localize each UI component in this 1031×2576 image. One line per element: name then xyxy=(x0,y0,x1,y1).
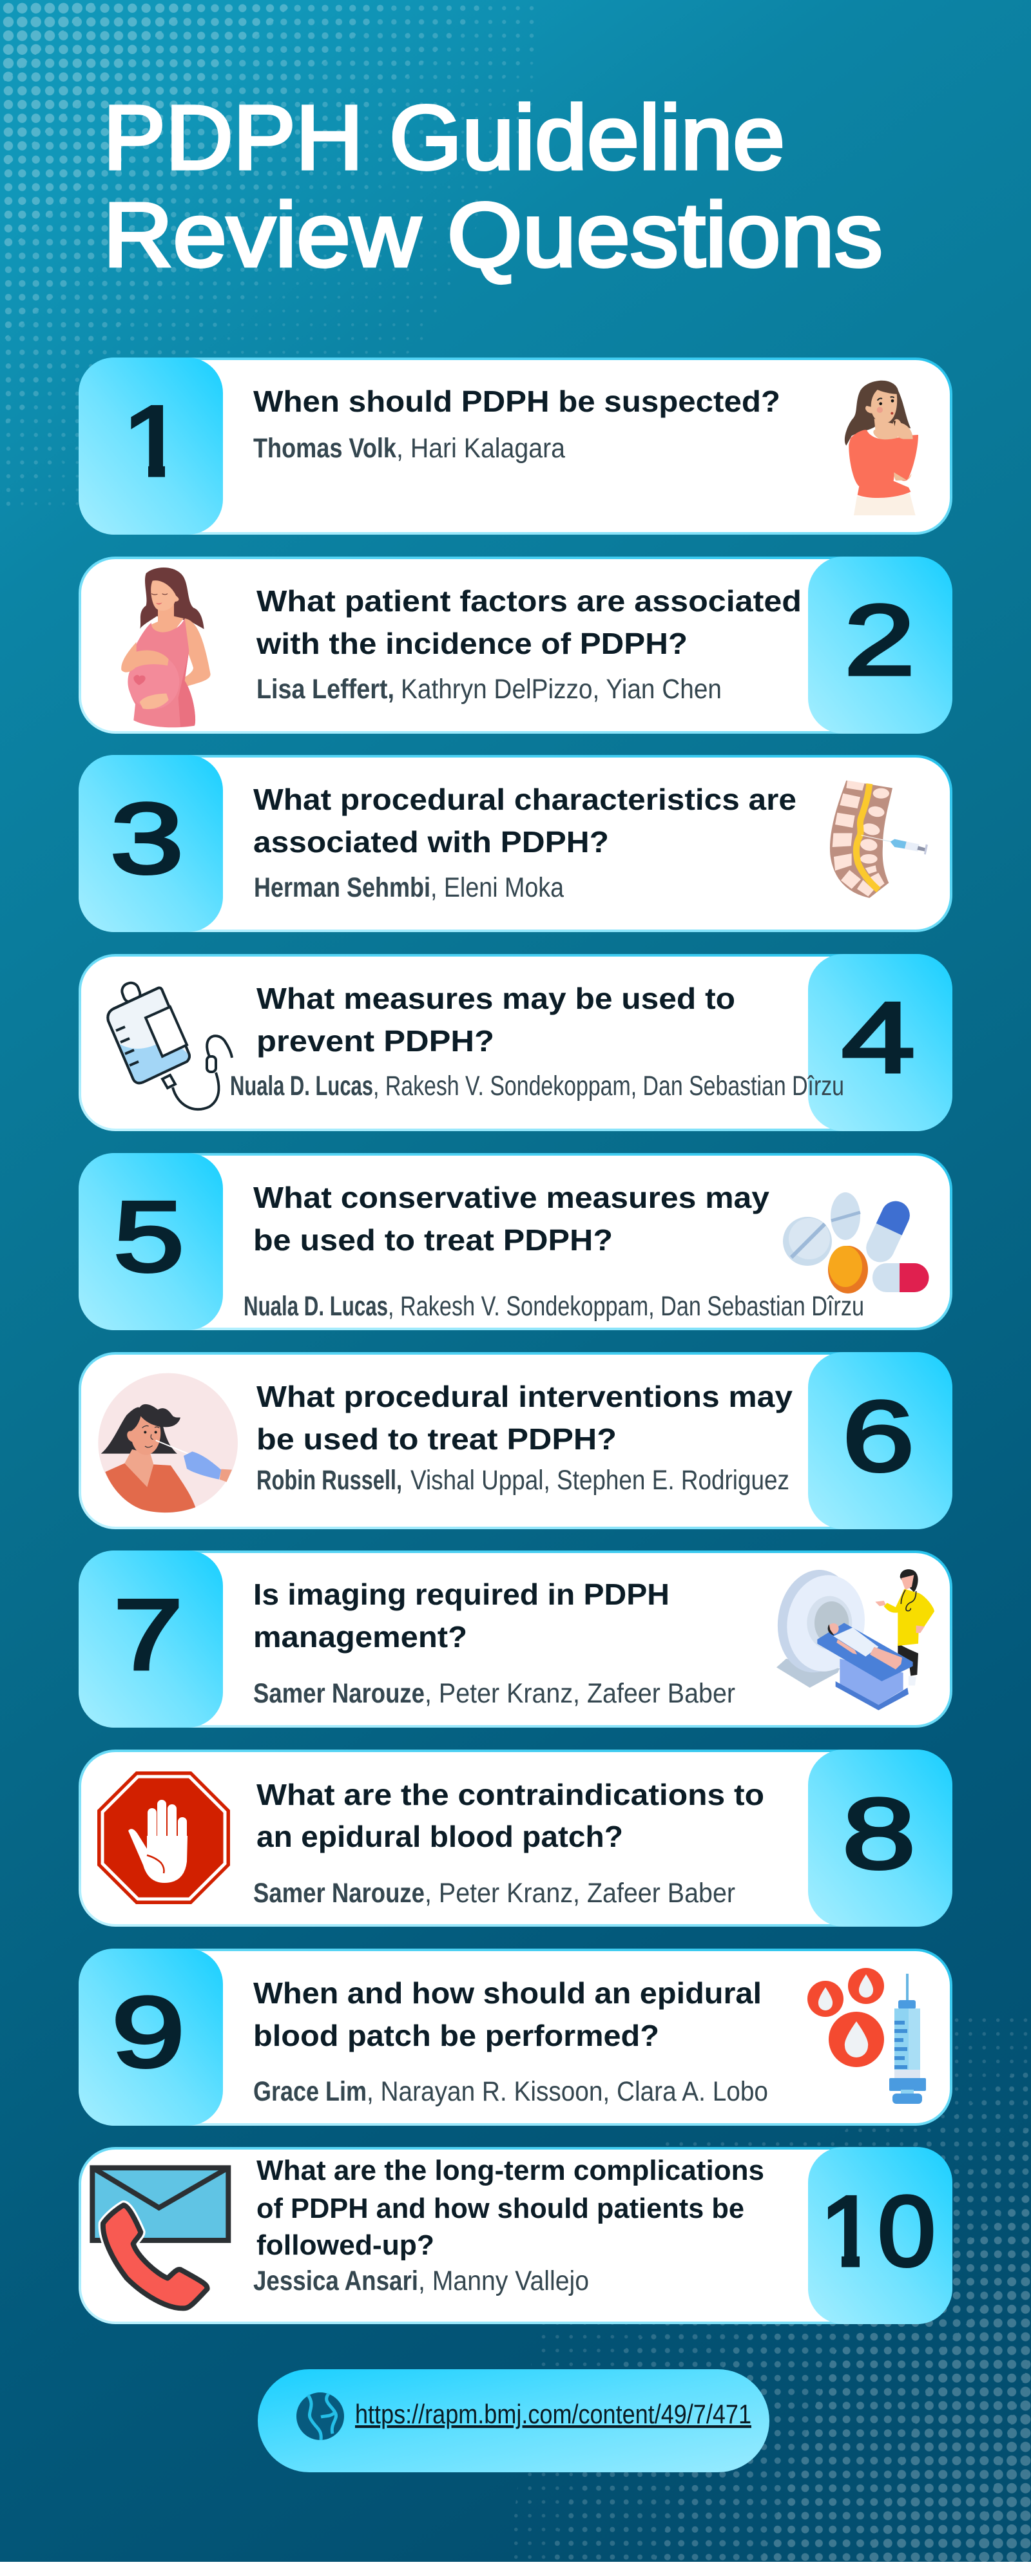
question text: Is imaging required in PDPH xyxy=(253,1578,670,1611)
authors: Thomas Volk xyxy=(253,433,396,464)
authors xyxy=(253,433,565,464)
authors xyxy=(230,1071,844,1102)
authors: Lisa Leffert, xyxy=(256,674,394,705)
authors: , Narayan R. Kissoon, Clara A. Lobo xyxy=(367,2076,768,2107)
authors: Herman Sehmbi xyxy=(254,872,430,903)
question text xyxy=(253,1181,769,1257)
panel: question 10 xyxy=(80,2147,952,2324)
authors: , Rakesh V. Sondekoppam, Dan Sebastian Dîrzu xyxy=(388,1291,864,1322)
title: Review Questions xyxy=(103,184,883,285)
panel: question 6 xyxy=(80,1352,952,1529)
question text xyxy=(256,1380,793,1456)
question text: What are the long-term complications xyxy=(256,2155,764,2186)
question text: What are the contraindications to xyxy=(256,1778,764,1811)
authors: Nuala D. Lucas xyxy=(230,1071,373,1102)
authors: Jessica Ansari xyxy=(253,2266,418,2296)
question text: What measures may be used to xyxy=(256,982,735,1015)
number 10: 10 xyxy=(820,2175,936,2287)
icon: stop hand sign xyxy=(97,1771,230,1904)
footer link pill xyxy=(258,2369,769,2472)
number 8: 8 xyxy=(842,1778,916,1889)
authors: Nuala D. Lucas xyxy=(244,1291,388,1322)
panel: question 9 xyxy=(79,1949,951,2126)
question text: What procedural characteristics are xyxy=(253,783,796,816)
question text: When should PDPH be suspected? xyxy=(253,385,780,418)
question text: be used to treat PDPH? xyxy=(253,1223,613,1257)
icon: blood drops and syringe xyxy=(807,1968,926,2104)
question text: What procedural interventions may xyxy=(256,1380,793,1413)
number 5: 5 xyxy=(113,1181,184,1292)
question text: When and how should an epidural xyxy=(253,1976,762,2010)
icon: MRI scanner with doctor xyxy=(771,1565,934,1710)
question text: with the incidence of PDPH? xyxy=(256,627,688,660)
authors: , Eleni Moka xyxy=(430,872,564,903)
number 7: 7 xyxy=(113,1579,183,1690)
question text: be used to treat PDPH? xyxy=(256,1422,617,1456)
panel: question 1 xyxy=(79,358,951,535)
authors xyxy=(256,674,722,705)
question text xyxy=(256,982,735,1058)
question text xyxy=(253,1578,670,1654)
number 4: 4 xyxy=(842,982,915,1093)
icon: thinking woman xyxy=(845,381,918,515)
authors xyxy=(256,1465,789,1496)
title xyxy=(103,86,883,285)
question text xyxy=(256,2155,764,2261)
panel: question 2 xyxy=(80,557,952,734)
number 6: 6 xyxy=(842,1380,914,1492)
authors: Samer Narouze xyxy=(253,1878,425,1909)
authors: , Manny Vallejo xyxy=(418,2266,589,2296)
icon: nasal swab xyxy=(98,1373,238,1512)
number 3: 3 xyxy=(110,783,184,894)
question text: followed-up? xyxy=(256,2229,434,2261)
question text xyxy=(256,1778,764,1853)
question text: prevent PDPH? xyxy=(256,1024,494,1058)
panel: question 7 xyxy=(79,1550,951,1728)
authors: , Hari Kalagara xyxy=(396,433,565,464)
authors xyxy=(254,872,564,903)
authors: , Rakesh V. Sondekoppam, Dan Sebastian Dîrzu xyxy=(373,1071,844,1102)
authors: Robin Russell, xyxy=(256,1465,402,1496)
panel: question 5 xyxy=(79,1153,951,1330)
question text: blood patch be performed? xyxy=(253,2019,659,2052)
question text xyxy=(256,584,802,660)
icon: pregnant woman xyxy=(121,568,211,727)
question text: What conservative measures may xyxy=(253,1181,769,1214)
question text: an epidural blood patch? xyxy=(256,1820,623,1853)
icon: envelope and phone xyxy=(92,2168,228,2308)
question text xyxy=(253,783,796,859)
question text: What patient factors are associated xyxy=(256,584,802,618)
authors xyxy=(253,1678,735,1709)
number 9: 9 xyxy=(111,1976,185,2088)
question text xyxy=(253,1976,762,2052)
link text: https://rapm.bmj.com/content/49/7/471 xyxy=(355,2399,751,2429)
authors: Kathryn DelPizzo, Yian Chen xyxy=(401,674,722,705)
authors: Vishal Uppal, Stephen E. Rodriguez xyxy=(410,1465,789,1496)
number 1: 1 xyxy=(122,385,186,497)
number 2: 2 xyxy=(844,584,915,696)
title: PDPH Guideline xyxy=(103,86,785,188)
authors: , Peter Kranz, Zafeer Baber xyxy=(425,1678,735,1709)
question text: of PDPH and how should patients be xyxy=(256,2193,744,2224)
authors xyxy=(253,1878,735,1909)
panel: question 4 xyxy=(80,954,952,1131)
icon: pills xyxy=(783,1192,929,1293)
icon: IV bag xyxy=(108,980,232,1109)
question text: associated with PDPH? xyxy=(253,825,609,859)
question text: management? xyxy=(253,1620,467,1654)
icon: spine with syringe xyxy=(830,781,928,898)
panel: question 3 xyxy=(79,755,951,932)
panel: question 8 xyxy=(80,1750,952,1927)
authors: Samer Narouze xyxy=(253,1678,425,1709)
authors xyxy=(253,2266,589,2296)
authors xyxy=(244,1291,864,1322)
icon: globe xyxy=(296,2392,344,2440)
authors: Grace Lim xyxy=(253,2076,367,2107)
authors: , Peter Kranz, Zafeer Baber xyxy=(425,1878,735,1909)
